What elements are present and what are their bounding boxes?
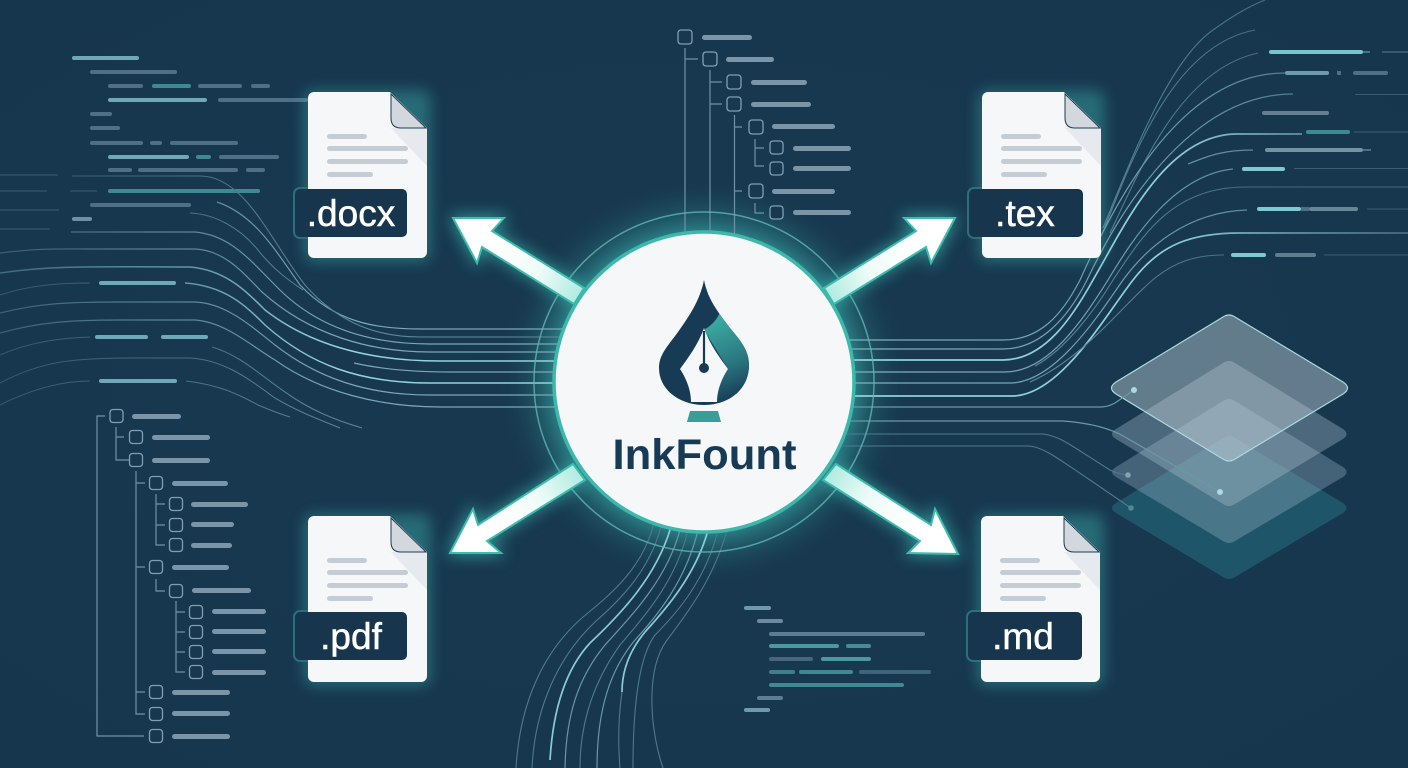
arrow: to pdf <box>450 464 585 553</box>
layer 4 <box>1112 436 1346 579</box>
document: .tex: .tex <box>995 193 1055 234</box>
layer 2 <box>1112 361 1346 506</box>
stacked layers <box>1112 315 1348 579</box>
document: .pdf <box>293 514 431 686</box>
hub disc <box>554 232 854 532</box>
code snippet: bottom centre <box>744 606 931 712</box>
arrow: to md <box>823 464 958 554</box>
layer 1 <box>1112 315 1348 461</box>
document: .tex <box>967 90 1105 262</box>
title: InkFount: InkFount <box>612 431 796 479</box>
document: .md <box>966 514 1104 686</box>
arrow glows <box>450 218 958 554</box>
arrow: to docx <box>453 218 584 304</box>
tree diagram: bottom left <box>97 410 266 742</box>
arrow: to tex <box>824 218 955 304</box>
document: .pdf: .pdf <box>320 616 383 657</box>
tree diagram: top centre <box>678 30 851 240</box>
icon: ink drop with pen nib <box>659 280 749 422</box>
flow lines: left to centre <box>0 175 590 428</box>
glow around hub <box>499 177 909 587</box>
document: .docx <box>293 90 431 262</box>
layer 3 <box>1112 399 1346 543</box>
flow lines: bottom <box>516 515 731 768</box>
outer ring <box>534 212 874 552</box>
code snippet: top left <box>72 56 308 221</box>
central hub <box>554 232 854 532</box>
flow lines: top right to centre <box>840 0 1408 396</box>
connector lines to layers <box>840 387 1223 511</box>
document: .md: .md <box>992 616 1054 657</box>
document: .docx: .docx <box>307 193 396 234</box>
